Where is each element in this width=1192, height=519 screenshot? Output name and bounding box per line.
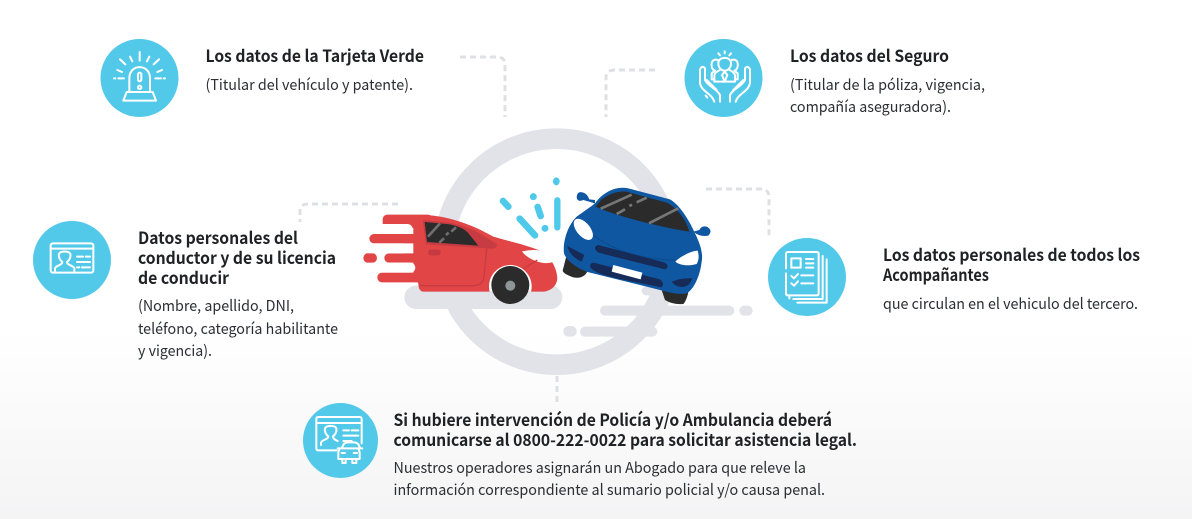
description: que circulan en el vehiculo del tercero.	[883, 293, 1138, 314]
description: (Nombre, apellido, DNI,	[138, 295, 294, 316]
grey ring and road	[404, 139, 753, 365]
heading	[394, 407, 857, 451]
icon: siren	[100, 39, 178, 117]
heading	[882, 242, 1140, 286]
panel: datos del conductor	[33, 221, 338, 361]
description: (Titular de la póliza, vigencia,	[790, 74, 985, 95]
description	[790, 74, 985, 117]
description: Nuestros operadores asignarán un Abogado para que releve la	[394, 457, 806, 478]
icon: id card	[33, 221, 111, 299]
heading: Los datos de la Tarjeta Verde	[206, 43, 424, 67]
collision sparks	[503, 177, 560, 235]
central illustration: car crash	[363, 139, 753, 365]
heading: Los datos del Seguro	[790, 43, 949, 67]
icon: hands holding people	[684, 39, 762, 117]
description: y vigencia).	[138, 340, 212, 361]
heading: Si hubiere intervención de Policía y/o Ambulancia deberá	[394, 407, 832, 431]
description: compañía aseguradora).	[790, 96, 951, 117]
panel: acompañantes	[768, 238, 1140, 316]
description	[394, 457, 825, 500]
heading	[138, 225, 336, 289]
description: teléfono, categoría habilitante	[138, 318, 338, 339]
heading: Los datos personales de todos los	[883, 242, 1140, 266]
description: (Titular del vehículo y patente).	[206, 74, 413, 95]
panel: seguro	[684, 39, 985, 117]
description	[138, 295, 338, 361]
red car	[363, 215, 557, 304]
heading: conductor y de su licencia	[138, 245, 336, 269]
blue car	[563, 188, 710, 304]
description: información correspondiente al sumario policial y/o causa penal.	[394, 479, 825, 500]
heading: de conducir	[138, 265, 230, 289]
panel: tarjeta verde	[100, 39, 424, 117]
icon: document checklist	[768, 238, 846, 316]
heading: comunicarse al 0800-222-0022 para solicitar asistencia legal.	[394, 427, 857, 451]
panel: policía y ambulancia	[303, 403, 857, 500]
heading: Acompañantes	[882, 262, 989, 286]
heading: Datos personales del	[138, 225, 298, 249]
icon: id card with car	[303, 403, 378, 478]
